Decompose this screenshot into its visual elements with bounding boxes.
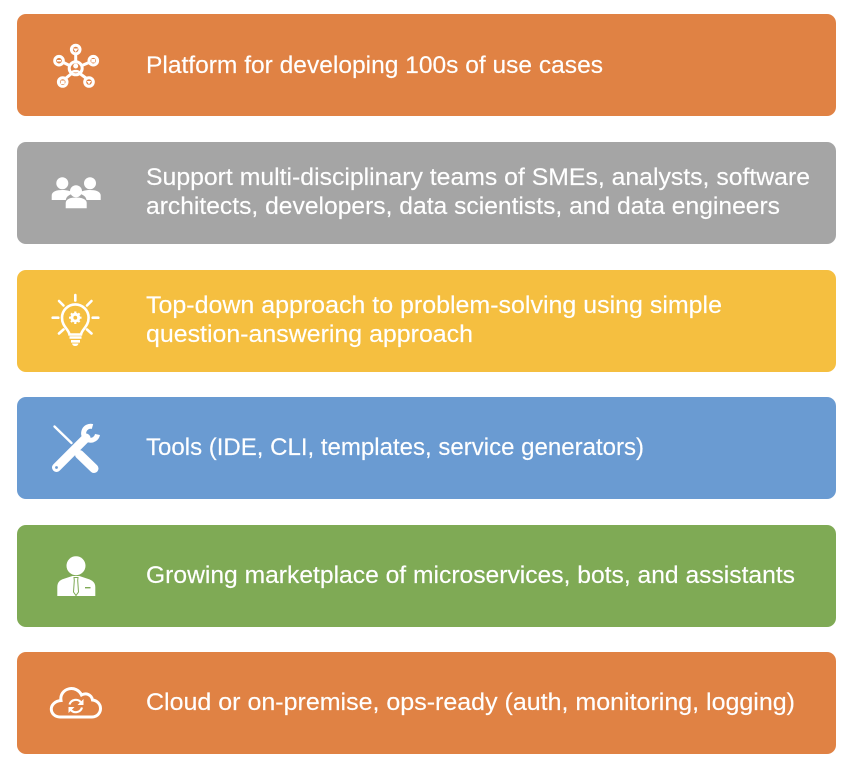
text: Platform for developing 100s of use cases xyxy=(146,52,603,79)
icon: cloud sync xyxy=(51,689,100,717)
text: Tools (IDE, CLI, templates, service generators) xyxy=(146,434,644,461)
icon: business person xyxy=(57,556,95,596)
panel: teams: architects, developers, data scientists, and data engineers xyxy=(146,193,780,220)
icon: wrench and screwdriver xyxy=(54,426,98,469)
panel: tools xyxy=(17,397,836,499)
text: Cloud or on-premise, ops-ready (auth, monitoring, logging) xyxy=(146,689,795,716)
panel: cloud xyxy=(17,652,836,754)
icon: three people xyxy=(52,177,101,208)
panel: platform xyxy=(17,14,836,116)
text: Support multi-disciplinary teams of SMEs, analysts, software xyxy=(146,164,810,191)
panel: approach xyxy=(17,270,836,372)
text: Growing marketplace of microservices, bots, and assistants xyxy=(146,562,795,589)
icon: network of people xyxy=(55,45,98,86)
icon: light bulb with gear xyxy=(53,295,98,346)
panel: approach: question-answering approach xyxy=(146,321,473,348)
panel: teams xyxy=(17,142,836,244)
panel: marketplace xyxy=(17,525,836,627)
text: Top-down approach to problem-solving using simple xyxy=(146,292,722,319)
